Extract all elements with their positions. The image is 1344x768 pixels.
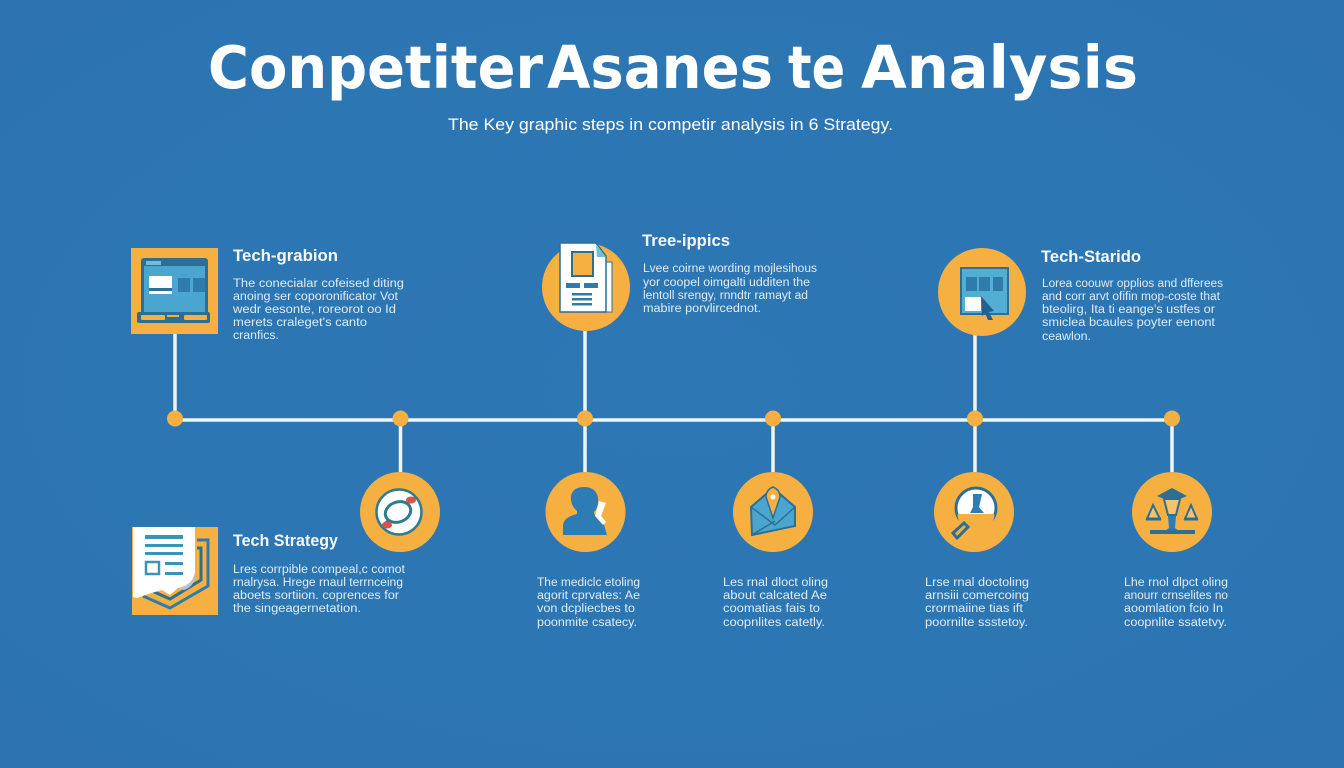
heading: Tree-ippics — [642, 232, 730, 250]
text block: bteolirg, Ita ti eange's ustfes or — [1042, 304, 1215, 316]
title: Asanes — [547, 33, 773, 102]
text block: lentoll srengy, rnndtr ramayt ad — [643, 290, 808, 302]
text block: coopnlite ssatetvy. — [1124, 617, 1227, 629]
title: Conpetiter — [208, 33, 543, 102]
panel: step 4 — [723, 472, 828, 629]
heading: Tech Strategy — [233, 532, 339, 550]
text block: von dcpliecbes to — [537, 603, 635, 615]
text block: Lhe rnol dlpct oling — [1124, 577, 1228, 589]
text block: Lrse rnal doctoling — [925, 577, 1029, 589]
heading: Tech-grabion — [233, 247, 338, 265]
text block — [1124, 577, 1228, 629]
text block: poornilte ssstetoy. — [925, 617, 1028, 629]
text block: ceawlon. — [1042, 331, 1091, 343]
subtitle: The Key graphic steps in competir analysis in 6 Strategy. — [448, 115, 893, 134]
text block: the singeagernetation. — [233, 603, 361, 615]
text block: poonmite csatecy. — [537, 617, 637, 629]
title — [208, 33, 1138, 102]
text block: Lres corrpible compeal,c comot — [233, 564, 406, 576]
text block: Les rnal dloct oling — [723, 577, 828, 589]
text block: The mediclc etoling — [537, 577, 640, 589]
text block: mabire porvlircednot. — [643, 303, 761, 315]
title: te — [788, 33, 845, 102]
text block: merets craleget's canto — [233, 317, 367, 329]
text block: anourr crnselites no — [1124, 590, 1228, 602]
text block: aoomlation fcio In — [1124, 603, 1223, 615]
text block: about calcated Ae — [723, 590, 827, 602]
text block: wedr eesonte, roreorot oo Id — [232, 304, 396, 316]
text block: Lorea coouwr opplios and dfferees — [1042, 278, 1223, 290]
icon: linked ring — [360, 472, 440, 552]
text block — [537, 577, 640, 629]
text block: yor coopel oimgalti udditen the — [643, 277, 810, 289]
text block — [233, 564, 406, 615]
icon: scales — [1132, 472, 1212, 552]
text block — [723, 577, 828, 629]
icon: envelope with pin — [733, 472, 813, 552]
panel: Tech Strategy — [132, 527, 406, 615]
timeline — [167, 328, 1180, 472]
icon: person on phone — [546, 472, 626, 552]
panel: step 2 — [360, 472, 440, 552]
text block: The conecialar cofeised diting — [233, 278, 404, 290]
text block: rnalrysa. Hrege rnaul terrnceing — [233, 577, 403, 589]
panel: step 5 — [925, 472, 1029, 629]
panel: step 6 — [1124, 472, 1228, 629]
panel: Tech-grabion — [131, 247, 404, 342]
text block: coopnlites catetly. — [723, 617, 825, 629]
text block: smiclea bcaules poyter eenont — [1042, 317, 1216, 329]
text block: aboets sortiion. coprences for — [233, 590, 399, 602]
icon: report pages — [132, 527, 218, 615]
text block: crormaiine tias ift — [925, 603, 1024, 615]
text block: anoing ser coporonificator Vot — [233, 291, 399, 303]
text block — [643, 263, 817, 315]
text block — [232, 278, 404, 342]
text block: cranfics. — [233, 330, 279, 342]
icon: screen with cursor — [938, 248, 1026, 336]
text block: agorit cprvates: Ae — [537, 590, 640, 602]
icon: magnifier — [934, 472, 1014, 552]
heading: Tech-Starido — [1041, 248, 1141, 266]
text block: arnsiii comercoing — [925, 590, 1029, 602]
text block: and corr arvt ofifin mop-coste that — [1042, 291, 1221, 303]
text block — [925, 577, 1029, 629]
text block: Lvee coirne wording mojlesihous — [643, 263, 817, 275]
icon: laptop — [131, 248, 218, 334]
panel: Tech-Starido — [938, 248, 1223, 343]
text block — [1042, 278, 1223, 343]
text block: coomatias fais to — [723, 603, 820, 615]
title: Analysis — [861, 33, 1138, 102]
icon: document — [542, 243, 630, 331]
panel: Tree-ippics — [542, 232, 817, 331]
panel: step 3 — [537, 472, 640, 629]
